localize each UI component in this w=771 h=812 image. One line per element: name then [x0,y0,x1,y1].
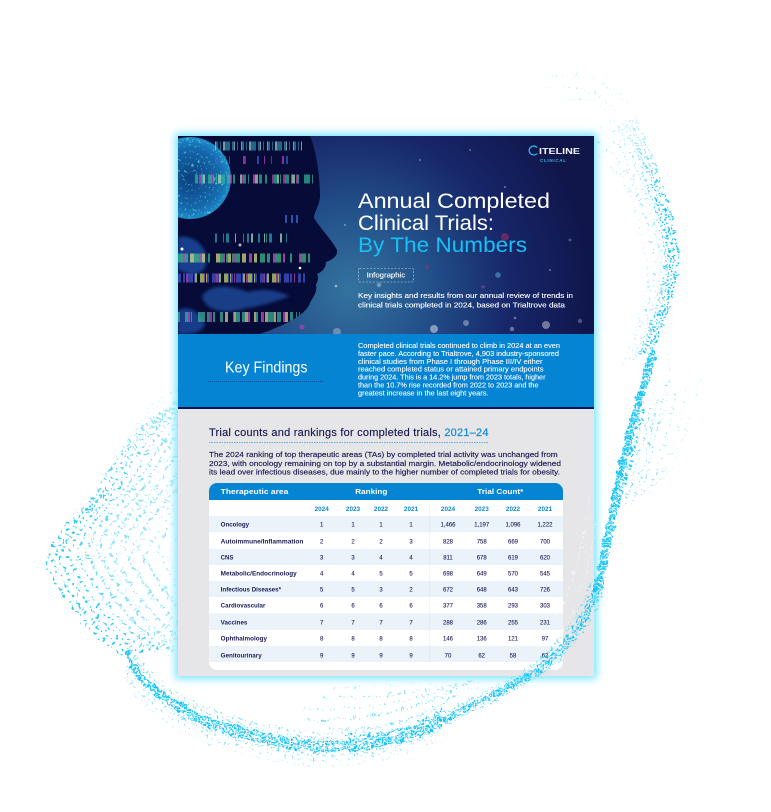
row: Autoimmune/Inflammation: 700 [540,540,551,546]
table year labels [315,506,553,513]
particle swirl: top right trail [545,75,648,195]
particle swirl: left lobe behind the page [46,380,304,660]
hero subtitle: clinical trials completed in 2024, based on Trialtrove data [358,300,566,310]
row: Infectious Diseases: 3 [379,588,383,594]
row: CNS: CNS [221,556,233,562]
section intro text: 2023, with oncology remaining on top by a substantial margin. Metabolic/endocrinology widened [209,459,561,468]
row: Genitourinary: 9 [409,654,413,660]
row: Autoimmune/Inflammation: 3 [409,540,413,546]
row: Genitourinary: 9 [351,654,355,660]
tag: Infographic: Infographic [367,270,406,280]
row: Vaccines: 255 [508,620,519,626]
row: Metabolic/Endocrinology [221,572,551,578]
row: Infectious Diseases: 5 [320,588,324,594]
logo: Citeline Clinical [529,146,581,163]
row: Ophthalmology: 146 [443,636,454,642]
row: Oncology: 1,466 [440,522,456,528]
key findings text: clinical studies from Phase I through Phase III/IV either [358,357,543,366]
row: Oncology: 1,197 [474,522,490,528]
row: Oncology: Oncology [221,522,250,528]
section intro text: its lead over infectious diseases, due mainly to the higher number of completed trials for obesity. [209,468,560,476]
panel: key findings band [178,334,594,409]
row: Cardiovascular: 6 [409,604,413,610]
row: Metabolic/Endocrinology: 5 [409,572,413,578]
row: Autoimmune/Inflammation: Autoimmune/Inflammation [221,540,304,546]
row: Ophthalmology: 8 [320,636,324,642]
image: human head profile with DNA bars [178,136,338,334]
row: Ophthalmology: Ophthalmology [221,636,268,642]
row: Oncology [221,522,553,528]
row: Vaccines: 288 [443,620,454,626]
row: Metabolic/Endocrinology: Metabolic/Endocrinology [221,572,297,578]
row: Infectious Diseases: Infectious Diseases* [221,588,282,594]
row: Autoimmune/Inflammation: 828 [443,540,454,546]
row: Vaccines: 7 [351,620,355,626]
row: CNS: 620 [540,556,551,562]
row: Oncology: 1 [379,522,383,528]
table year labels: 2024 [315,506,329,513]
hero subtitle [358,292,572,309]
row: Ophthalmology: 8 [351,636,355,642]
page glow [175,133,597,679]
title [358,189,550,257]
table shaded rows [209,516,563,662]
row: Vaccines: 7 [379,620,383,626]
row: Metabolic/Endocrinology: 649 [477,572,487,578]
particle swirl: right side and bottom ribbon in front of the page [123,122,700,766]
panel: infographic page [149,136,594,676]
key findings text: than the 10.7% rise recorded from 2022 to 2023 and the [358,380,538,390]
row: Oncology: 1 [409,522,413,528]
logo: Citeline Clinical: ITELINE [539,147,581,156]
row: CNS: 678 [477,556,487,562]
row: CNS: 3 [320,556,324,562]
table year labels: 2022 [374,506,389,513]
logo: Citeline Clinical: CLINICAL [540,158,566,163]
key findings text: Completed clinical trials continued to climb in 2024 at an even [358,341,560,350]
row: Cardiovascular: 6 [351,604,355,610]
heading: Key Findings: Key Findings [225,360,308,376]
panel: hero banner [149,136,594,336]
row: Autoimmune/Inflammation: 758 [477,540,487,546]
table header: Trial Count* [477,487,523,496]
row: Vaccines [221,620,551,626]
row: Infectious Diseases: 2 [409,588,413,594]
row: Cardiovascular: 303 [540,604,551,610]
row: Ophthalmology: 8 [409,636,413,642]
hero subtitle: Key insights and results from our annual review of trends in [358,291,573,300]
table header: Ranking [355,487,388,496]
table year labels: 2023 [475,506,489,513]
table: rankings and trial counts [209,483,563,670]
row: Genitourinary: 9 [379,654,383,660]
key findings text: reached completed status or attained primary endpoints [358,365,544,374]
row: Ophthalmology: 136 [477,636,487,642]
tag: Infographic [358,268,414,282]
row: CNS [221,556,551,562]
row: Oncology: 1,222 [537,522,553,528]
row: Genitourinary: 62 [542,654,549,660]
row: CNS: 811 [443,556,453,562]
row: CNS: 4 [379,556,383,562]
row: Metabolic/Endocrinology: 4 [351,572,355,578]
key findings text: faster pace. According to Trialtrove, 4,903 industry-sponsored [358,349,559,358]
row: Cardiovascular: 293 [508,604,519,610]
table header [209,483,563,500]
row: Autoimmune/Inflammation: 2 [320,540,324,546]
row: Oncology: 1 [351,522,355,528]
table year labels: 2021 [538,506,553,513]
row: Vaccines: 286 [477,620,487,626]
row: Ophthalmology [221,636,549,642]
title: Annual Completed [358,189,550,213]
row: Vaccines: 231 [540,620,551,626]
row: Infectious Diseases: 726 [540,588,551,594]
section intro text [209,450,561,476]
row: Genitourinary: Genitourinary [221,654,262,660]
row: Genitourinary: 70 [445,654,452,660]
row: Infectious Diseases [221,588,551,594]
row: Metabolic/Endocrinology: 5 [379,572,383,578]
title: By The Numbers [358,233,527,257]
row: Genitourinary: 9 [320,654,324,660]
row: Autoimmune/Inflammation: 2 [351,540,355,546]
section heading: Trial counts and rankings for completed trials, 2021–24 [209,427,488,439]
row: Cardiovascular [221,604,551,610]
row: Genitourinary: 62 [478,654,486,660]
table year labels: 2024 [441,506,456,513]
row: Vaccines: 7 [320,620,324,626]
row: Autoimmune/Inflammation: 2 [379,540,383,546]
row: CNS: 3 [351,556,355,562]
row: Vaccines: Vaccines [221,620,248,626]
row: Genitourinary [221,654,549,660]
row: Cardiovascular: 358 [477,604,487,610]
table year labels: 2023 [346,506,361,513]
decorative bokeh particles [180,149,582,336]
panel: trial counts section [178,409,594,676]
row: Oncology: 1,096 [505,522,521,528]
row: Cardiovascular: 6 [320,604,324,610]
row: Infectious Diseases: 672 [443,588,454,594]
row: Vaccines: 7 [409,620,413,626]
row: Cardiovascular: 6 [379,604,383,610]
row: Autoimmune/Inflammation [221,540,551,546]
section intro text: The 2024 ranking of top therapeutic areas (TAs) by completed trial activity was unchanged from [209,450,558,459]
row: Infectious Diseases: 643 [508,588,519,594]
title: Clinical Trials: [358,211,494,235]
row: CNS: 619 [508,556,519,562]
row: Cardiovascular: Cardiovascular [221,604,266,610]
row: Metabolic/Endocrinology: 698 [443,572,454,578]
row: Autoimmune/Inflammation: 669 [508,540,519,546]
row: Cardiovascular: 377 [443,604,454,610]
row: Metabolic/Endocrinology: 570 [508,572,519,578]
key findings text [358,341,560,398]
row: Metabolic/Endocrinology: 545 [540,572,551,578]
table header: Therapeutic area [221,487,289,496]
row: CNS: 4 [409,556,413,562]
row: Oncology: 1 [320,522,324,528]
row: Ophthalmology: 121 [508,636,519,642]
row: Ophthalmology: 97 [542,636,549,642]
row: Metabolic/Endocrinology: 4 [320,572,324,578]
key findings text: during 2024. This is a 14.2% jump from 2023 totals, higher [358,372,546,382]
table year labels: 2021 [404,506,419,513]
key findings text: greatest increase in the last eight years. [358,388,488,398]
row: Infectious Diseases: 5 [351,588,355,594]
row: Ophthalmology: 8 [379,636,383,642]
row: Genitourinary: 58 [510,654,517,660]
table year labels: 2022 [506,506,521,513]
row: Infectious Diseases: 648 [477,588,487,594]
infographic canvas [46,72,701,768]
